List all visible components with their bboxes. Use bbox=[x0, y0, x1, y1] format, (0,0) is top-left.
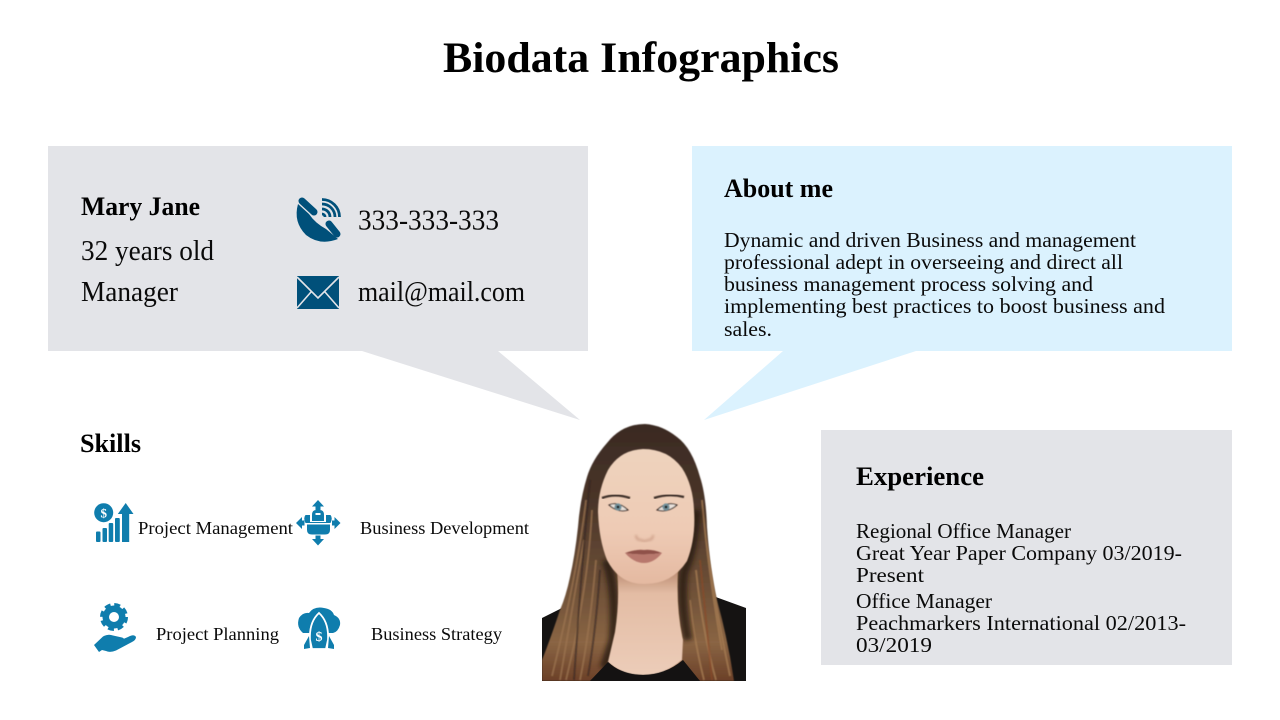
eyes bbox=[609, 503, 677, 511]
heading: experience: Experience bbox=[856, 462, 984, 491]
experience entries: 03/2019 bbox=[856, 633, 932, 657]
black top bbox=[590, 660, 700, 681]
experience entries bbox=[856, 519, 1186, 657]
hair strands bbox=[552, 480, 730, 680]
experience entries: Regional Office Manager bbox=[856, 519, 1071, 543]
email: mail@mail.com bbox=[358, 277, 525, 308]
about me paragraph: professional adept in overseeing and direct all bbox=[724, 250, 1123, 274]
icon: financial growth chart: $ bbox=[100, 506, 107, 520]
icon: rocket and cloud: $ bbox=[316, 630, 322, 645]
panel: personal details bbox=[48, 146, 588, 420]
heading: about me: About me bbox=[724, 174, 833, 203]
experience entries: Office Manager bbox=[856, 589, 992, 613]
icon: phone bbox=[297, 200, 340, 242]
job title: Manager bbox=[81, 277, 179, 308]
experience background bbox=[821, 430, 1232, 665]
hair bbox=[542, 424, 734, 681]
panel: skills bbox=[80, 429, 529, 652]
heading: skills: Skills bbox=[80, 429, 141, 458]
about me paragraph: Dynamic and driven Business and management bbox=[724, 228, 1136, 252]
experience entries: Present bbox=[856, 563, 924, 587]
neck and chest bbox=[608, 570, 683, 675]
skill label: Business Strategy bbox=[371, 624, 502, 644]
icon: financial growth chart bbox=[94, 503, 134, 542]
phone number: 333-333-333 bbox=[358, 206, 499, 236]
about me paragraph bbox=[724, 228, 1166, 341]
about me paragraph: business management process solving and bbox=[724, 272, 1094, 296]
skill label: Project Planning bbox=[156, 624, 279, 644]
hair shadows beside neck bbox=[604, 510, 696, 668]
icon: gear in hand bbox=[94, 604, 136, 652]
lips bbox=[625, 550, 662, 563]
nose bbox=[636, 535, 653, 541]
eyebrows bbox=[602, 495, 684, 498]
speech bubble: personal details bbox=[48, 146, 588, 420]
icon: rocket and cloud bbox=[298, 608, 340, 649]
skill label: Business Development bbox=[360, 518, 529, 538]
name: Mary Jane bbox=[81, 192, 200, 221]
title: Biodata Infographics bbox=[443, 35, 839, 82]
about me paragraph: implementing best practices to boost business and bbox=[724, 294, 1166, 318]
portrait photo bbox=[542, 424, 746, 681]
experience entries: Peachmarkers International 02/2013- bbox=[856, 611, 1186, 635]
panel: about me bbox=[692, 146, 1232, 420]
speech bubble: about me bbox=[692, 146, 1232, 420]
panel: experience bbox=[821, 430, 1232, 665]
experience entries: Great Year Paper Company 03/2019- bbox=[856, 541, 1182, 565]
face bbox=[598, 449, 694, 584]
jacket bbox=[542, 596, 746, 681]
skill label: Project Management bbox=[138, 518, 293, 538]
about me paragraph: sales. bbox=[724, 317, 772, 341]
icon: envelope bbox=[297, 276, 339, 309]
age: 32 years old bbox=[81, 236, 214, 267]
icon: business development bbox=[296, 500, 340, 546]
